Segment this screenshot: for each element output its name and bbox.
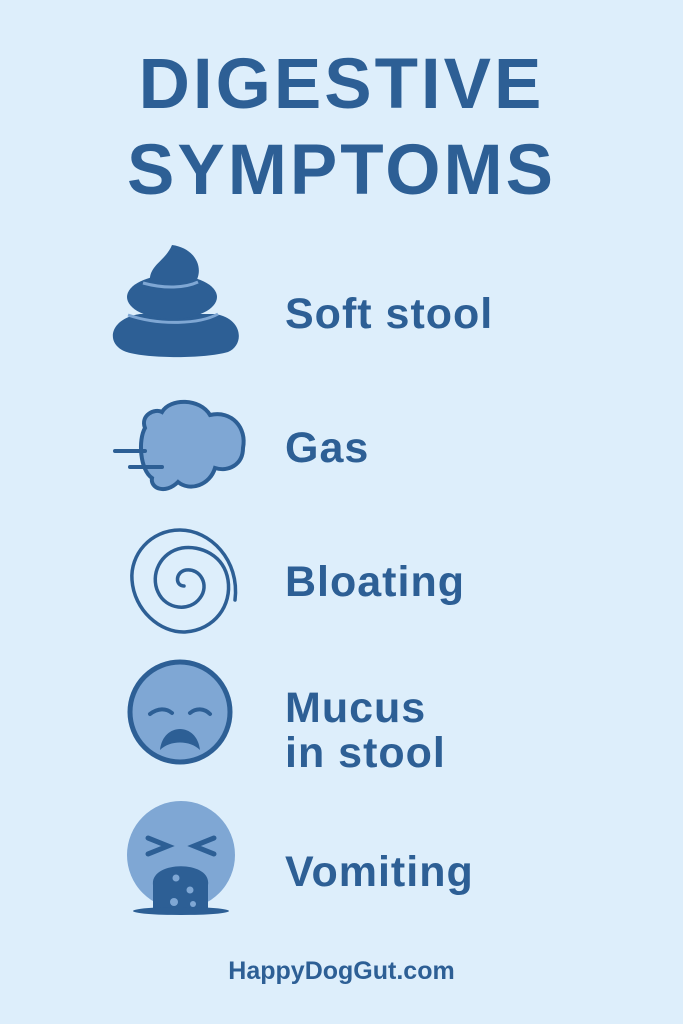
label: mucus in stool: Mucus xyxy=(285,684,426,732)
icon: spiral xyxy=(132,530,236,632)
label: mucus in stool xyxy=(285,684,446,777)
icon: sad face xyxy=(130,662,230,762)
label: soft stool: Soft stool xyxy=(285,290,493,338)
footer: HappyDogGut.com xyxy=(228,957,455,985)
label: mucus in stool: in stool xyxy=(285,729,446,777)
title xyxy=(127,45,556,210)
label: vomiting: Vomiting xyxy=(285,848,474,896)
title: SYMPTOMS xyxy=(127,131,556,210)
label: bloating: Bloating xyxy=(285,558,465,606)
title: DIGESTIVE xyxy=(139,45,544,124)
icon: vomiting face xyxy=(127,801,235,915)
label: gas: Gas xyxy=(285,424,369,472)
icon: soft stool xyxy=(113,245,239,357)
icon: gas cloud xyxy=(115,402,244,489)
